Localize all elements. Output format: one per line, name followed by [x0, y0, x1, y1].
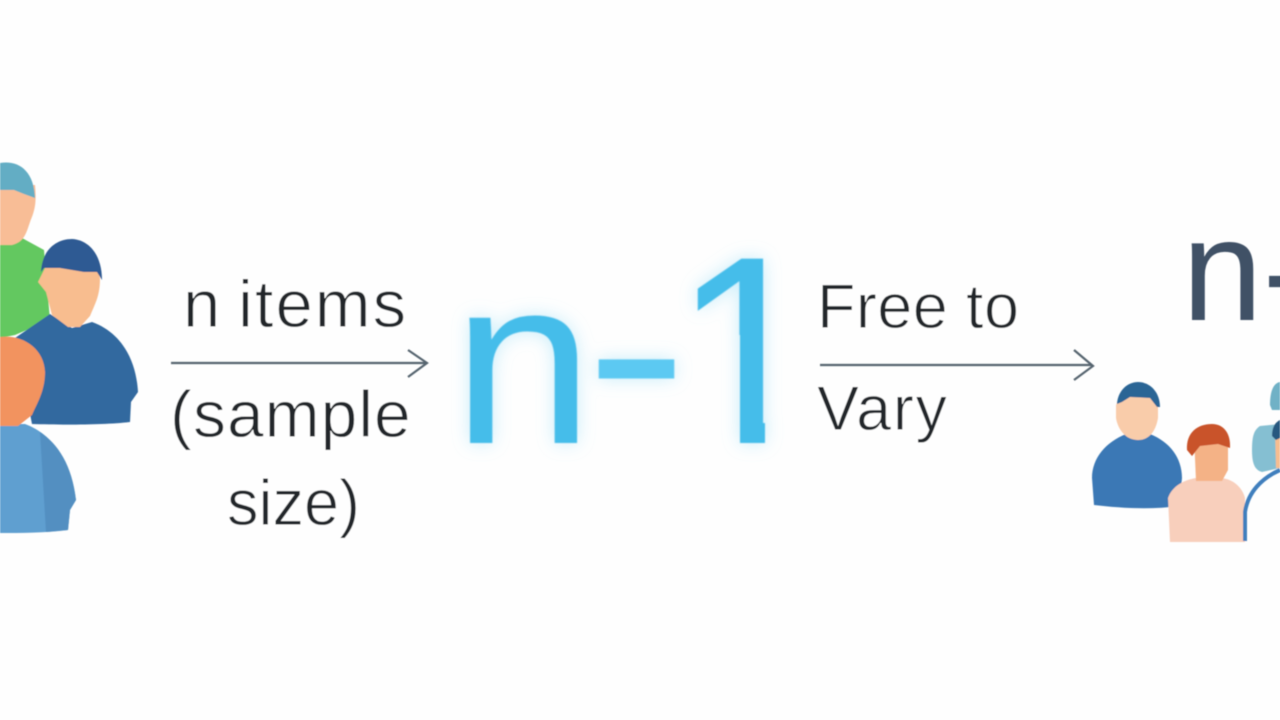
arrow: n-1 to free items	[820, 350, 1093, 380]
arrow: sample to n-1	[171, 350, 427, 377]
person: blue shirt	[15, 239, 138, 425]
person: green shirt	[0, 162, 50, 338]
person: orange head, light blue shirt	[0, 337, 76, 533]
right group of people	[1092, 382, 1280, 542]
big formula: n-1: n	[452, 230, 594, 494]
big formula: n-1	[461, 250, 774, 451]
left group of people	[0, 162, 138, 533]
label: Vary: Vary	[817, 374, 948, 444]
label: n items: n	[183, 267, 220, 342]
minus bar: -	[585, 212, 688, 486]
label: size): size)	[227, 466, 360, 539]
person: teal shirt, partly hidden	[1252, 382, 1280, 472]
digit one, foot clipped: 1	[672, 200, 821, 500]
person: dark hair, outlined shirt	[1245, 420, 1280, 541]
person: blue shirt	[1092, 382, 1182, 508]
label: (sample: (sample	[170, 377, 412, 451]
label: n items: items	[238, 267, 408, 342]
person: red hair, peach shirt	[1168, 424, 1245, 542]
label: Free to: Free to	[817, 272, 1019, 342]
